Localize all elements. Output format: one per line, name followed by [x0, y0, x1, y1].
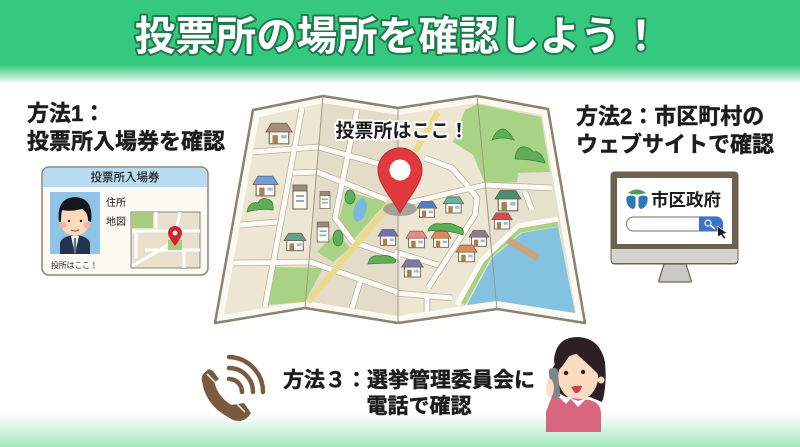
fold shading [305, 103, 398, 316]
fold lines [305, 96, 497, 323]
heading: method 3 [283, 369, 535, 418]
trees and bushes [247, 129, 545, 264]
land [224, 103, 576, 316]
address labels: 地図 [106, 215, 126, 228]
title: 投票所の場所を確認しよう！ [135, 13, 661, 59]
map pin [378, 148, 422, 216]
road edges [233, 108, 552, 312]
park top right [453, 104, 550, 183]
search box [626, 216, 723, 231]
mid park [338, 192, 387, 238]
map [215, 96, 585, 323]
heading: method 2 [576, 104, 774, 157]
monitor [610, 172, 738, 282]
panel: admission ticket [42, 167, 208, 275]
heading: method 2: 方法2：市区町村の [576, 104, 764, 129]
water [467, 227, 575, 313]
shore road [463, 224, 558, 304]
address labels: 住所 [106, 196, 126, 209]
address labels [106, 196, 126, 228]
map label: 投票所はここ！ [335, 120, 469, 142]
pond [351, 197, 369, 223]
heading: method 3: 電話で確認 [366, 395, 472, 418]
pier [508, 240, 538, 258]
yellow road [308, 112, 438, 302]
bottom left park [268, 267, 323, 305]
heading: method 3: 方法３：選挙管理委員会に [283, 369, 535, 392]
cursor [717, 226, 727, 239]
houses [253, 123, 521, 277]
heading: method 2: ウェブサイトで確認 [576, 132, 774, 157]
ticket caption: 投所はここ！ [51, 260, 98, 270]
portrait of man [50, 192, 100, 254]
heading: method 1: 方法1： [27, 101, 105, 126]
roads [233, 108, 552, 312]
icon: telephone [202, 357, 263, 421]
mini map [131, 212, 200, 268]
city logo [626, 190, 648, 209]
pin [168, 226, 182, 246]
woman on phone [546, 337, 606, 432]
heading: method 1 [27, 101, 225, 154]
header band [0, 0, 800, 84]
stand [659, 264, 691, 282]
ticket title: 投票所入場券 [90, 170, 160, 184]
city name: 市区政府 [651, 190, 721, 210]
heading: method 1: 投票所入場券を確認 [27, 129, 225, 154]
footer band [0, 414, 800, 447]
phone handset [548, 368, 561, 398]
